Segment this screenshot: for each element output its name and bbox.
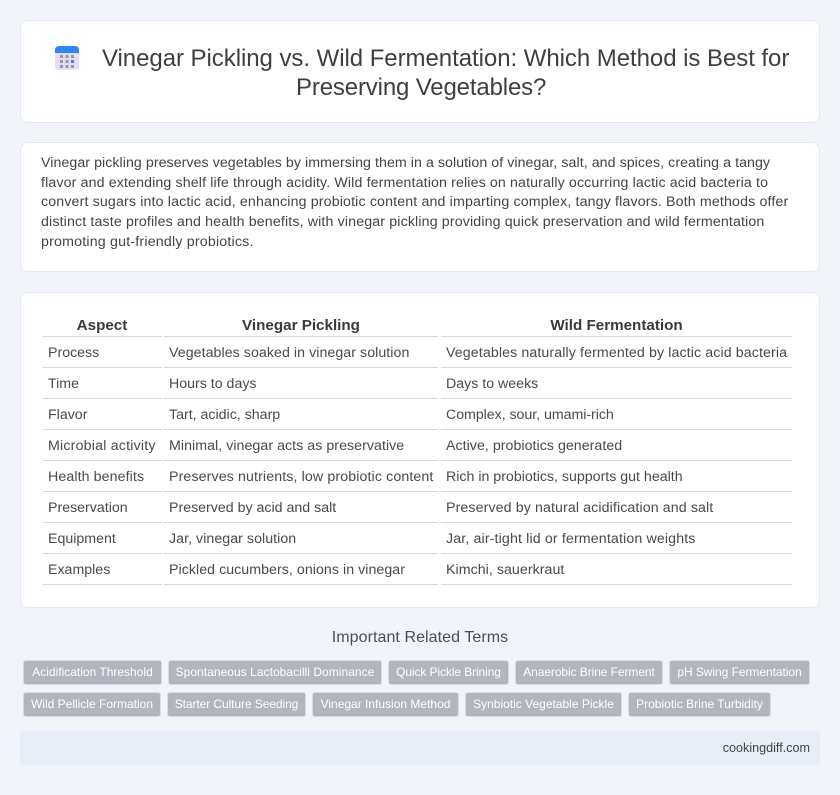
- tag: [23, 692, 161, 717]
- comparison table: [43, 317, 792, 585]
- row: flavor: [48, 407, 614, 423]
- title: Preserving Vegetables?: [296, 74, 546, 101]
- row: time: Time: [48, 376, 79, 392]
- row: process: Vegetables soaked in vinegar solution: [169, 345, 409, 361]
- header: vinegar pickling: Vinegar Pickling: [242, 317, 360, 334]
- row: microbial activity: [48, 438, 622, 454]
- panel: comparison table: [20, 292, 820, 608]
- summary text: promoting gut-friendly probiotics.: [41, 234, 254, 250]
- tag: [515, 660, 663, 685]
- row: examples: Examples: [48, 562, 110, 578]
- summary text: flavor and extending shelf life through acidity. Wild fermentation relies on naturally occurring lactic acid bacteria to: [41, 175, 768, 191]
- icon: calendar: [55, 46, 79, 70]
- row: flavor: Flavor: [48, 407, 87, 423]
- row: equipment: Jar, vinegar solution: [169, 531, 296, 547]
- header: aspect: Aspect: [77, 317, 127, 334]
- row: process: Vegetables naturally fermented by lactic acid bacteria: [446, 345, 787, 361]
- tag: [669, 660, 810, 685]
- tag: Acidification Threshold: [32, 665, 153, 679]
- tag: [628, 692, 771, 717]
- row: microbial activity: Active, probiotics generated: [446, 438, 622, 454]
- tag: pH Swing Fermentation: [677, 665, 802, 679]
- footer bar: [20, 731, 820, 765]
- panel: summary: [20, 142, 820, 272]
- tag: Vinegar Infusion Method: [321, 697, 450, 711]
- heading: related terms: Important Related Terms: [332, 629, 508, 646]
- related term tags: [23, 660, 810, 717]
- header panel: [20, 20, 820, 123]
- tag: [168, 660, 382, 685]
- tag: Anaerobic Brine Ferment: [523, 665, 655, 679]
- row: preservation: [48, 500, 714, 516]
- row: health benefits: Health benefits: [48, 469, 144, 485]
- row: flavor: Tart, acidic, sharp: [169, 407, 280, 423]
- tag: Starter Culture Seeding: [175, 697, 298, 711]
- row: health benefits: Preserves nutrients, low probiotic content: [169, 469, 433, 485]
- title: [102, 45, 789, 101]
- tag: Synbiotic Vegetable Pickle: [473, 697, 614, 711]
- summary text: distinct taste profiles and health benefits, with vinegar pickling providing quick preservation and wild fermentation: [41, 214, 764, 230]
- tag: Probiotic Brine Turbidity: [636, 697, 763, 711]
- summary text: convert sugars into lactic acid, enhancing probiotic content and imparting complex, tangy flavors. Both methods offer: [41, 194, 788, 210]
- row: examples: Kimchi, sauerkraut: [446, 562, 564, 578]
- tag: [465, 692, 622, 717]
- row: microbial activity: Microbial activity: [48, 438, 156, 454]
- tag: Wild Pellicle Formation: [31, 697, 153, 711]
- header: wild fermentation: Wild Fermentation: [550, 317, 683, 334]
- row: health benefits: [48, 469, 683, 485]
- tag: Spontaneous Lactobacilli Dominance: [176, 665, 374, 679]
- row: time: Hours to days: [169, 376, 257, 392]
- row: process: [48, 345, 787, 361]
- row: process: Process: [48, 345, 99, 361]
- row: flavor: Complex, sour, umami-rich: [446, 407, 614, 423]
- row: equipment: Equipment: [48, 531, 116, 547]
- row: time: [48, 376, 538, 392]
- tag: [388, 660, 509, 685]
- title: Vinegar Pickling vs. Wild Fermentation: Which Method is Best for: [102, 45, 789, 72]
- row: examples: [48, 562, 564, 578]
- summary text: [41, 155, 788, 250]
- row: microbial activity: Minimal, vinegar acts as preservative: [169, 438, 404, 454]
- row: preservation: Preserved by acid and salt: [169, 500, 336, 516]
- row: health benefits: Rich in probiotics, supports gut health: [446, 469, 683, 485]
- summary text: Vinegar pickling preserves vegetables by immersing them in a solution of vinegar, salt, and spices, creating a tangy: [41, 155, 770, 171]
- footer source: cookingdiff.com: [723, 741, 810, 755]
- row: preservation: Preserved by natural acidification and salt: [446, 500, 713, 516]
- row: equipment: [48, 531, 696, 547]
- tag: [167, 692, 306, 717]
- row: time: Days to weeks: [446, 376, 538, 392]
- tag: Quick Pickle Brining: [396, 665, 501, 679]
- row: preservation: Preservation: [48, 500, 128, 516]
- row: equipment: Jar, air-tight lid or fermentation weights: [446, 531, 696, 547]
- tag: [23, 660, 162, 685]
- tag: [312, 692, 459, 717]
- row: examples: Pickled cucumbers, onions in vinegar: [169, 562, 405, 578]
